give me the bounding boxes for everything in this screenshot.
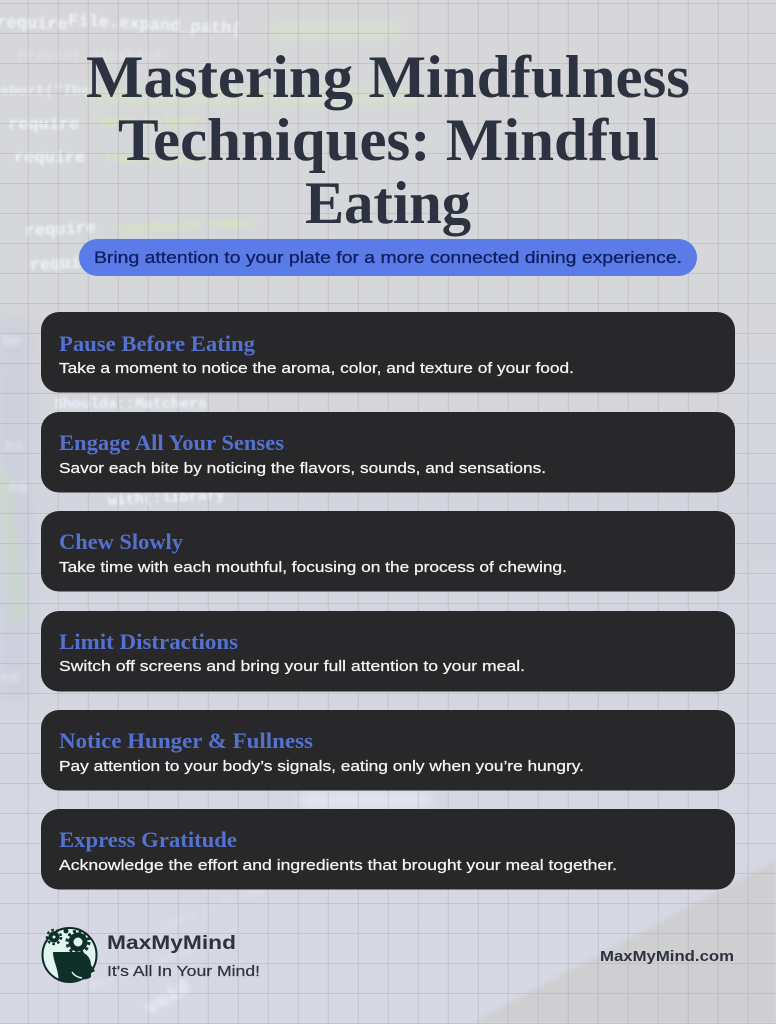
- background: blurred code photo: ss: [4, 437, 23, 455]
- icon: MaxMyMind logo head with gears: [42, 928, 96, 982]
- title: Techniques: Mindful: [118, 107, 659, 173]
- panel: limit distractions: [41, 611, 735, 692]
- background: blurred code photo: abort("The: [0, 83, 90, 100]
- panel: limit distractions: Limit Distractions: [59, 629, 238, 654]
- background: blurred code photo: require: [29, 253, 102, 276]
- background: blurred code photo: require: [24, 219, 97, 242]
- panel: notice hunger and fullness: Pay attention to your body’s signals, eating only when you’re hungry.: [59, 758, 584, 775]
- panel: pause before eating: Take a moment to notice the aroma, color, and texture of your food.: [59, 360, 574, 377]
- background: blurred code photo: 'spec_helper': [90, 114, 207, 131]
- panel: notice hunger and fullness: [41, 710, 735, 790]
- background: blurred code photo: require: [8, 116, 79, 135]
- background: blurred code photo: void: [142, 976, 194, 1021]
- panel: chew slowly: Take time with each mouthful, focusing on the process of chewing.: [59, 559, 567, 576]
- background: blurred code photo: Prevent database: [18, 48, 162, 65]
- panel: engage all your senses: Savor each bite by noticing the flavors, sounds, and sensations.: [59, 460, 546, 477]
- title: [86, 44, 690, 236]
- background: blurred code photo: data model access: [87, 944, 197, 994]
- background: blurred code photo: require: [14, 149, 85, 168]
- panel: chew slowly: [41, 511, 735, 592]
- website: MaxMyMind.com: [600, 948, 734, 965]
- panel: express gratitude: Express Gratitude: [59, 827, 237, 852]
- background: blurred code photo: be: [2, 332, 21, 350]
- background: blurred code photo: with(:library: [107, 487, 225, 510]
- panel: engage all your senses: [41, 412, 735, 492]
- panel: limit distractions: Switch off screens and bring your full attention to your meal.: [59, 658, 525, 675]
- tagline: It's All In Your Mind!: [107, 963, 260, 980]
- background: blurred code photo: ed: [0, 669, 19, 687]
- background: blurred code photo: Shoulda::Matchers: [54, 396, 207, 413]
- panel: pause before eating: [41, 312, 735, 392]
- background: blurred code photo: expect it to load: [157, 884, 267, 934]
- panel: chew slowly: Chew Slowly: [59, 529, 183, 554]
- panel: pause before eating: Pause Before Eating: [59, 331, 255, 356]
- panel: notice hunger and fullness: Notice Hunger & Fullness: [59, 728, 313, 753]
- brand name: MaxMyMind: [107, 932, 236, 954]
- background: blurred code photo: 'copyboard/rspec': [107, 214, 261, 239]
- panel: express gratitude: [41, 809, 735, 890]
- background: blurred code photo: File.expand_path(: [68, 12, 242, 40]
- panel: express gratitude: Acknowledge the effort and ingredients that brought your meal together.: [59, 857, 617, 874]
- subtitle pill: Bring attention to your plate for a more connected dining experience.: [94, 249, 682, 267]
- background: blurred code photo: 'rspec/rails': [95, 150, 212, 167]
- subtitle pill: [79, 239, 697, 276]
- panel: engage all your senses: Engage All Your Senses: [59, 430, 284, 455]
- title: Mastering Mindfulness: [86, 44, 690, 110]
- title: Eating: [305, 170, 471, 236]
- background: blurred code photo: ag: [8, 477, 27, 495]
